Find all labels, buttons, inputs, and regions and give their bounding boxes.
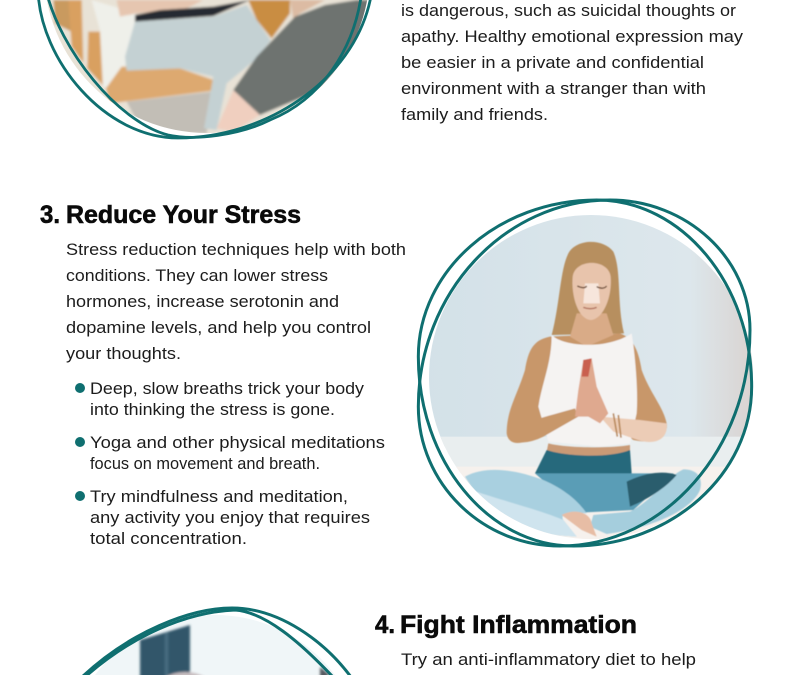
photo: woman meditating circle — [420, 207, 757, 550]
text block: section 2 closing paragraph: apathy. Healthy emotional expression may — [401, 27, 744, 46]
bullet: yoga: Yoga and other physical meditations — [90, 434, 385, 452]
bullet: mindfulness: any activity you enjoy that requires — [90, 509, 370, 527]
text block: stress reduction paragraph: hormones, increase serotonin and — [66, 292, 339, 311]
bullet: mindfulness: total concentration. — [90, 530, 247, 548]
text block: section 2 closing paragraph — [401, 1, 744, 124]
text block: section 2 closing paragraph: environment with a stranger than with — [401, 79, 706, 98]
bullet list: stress techniques — [75, 380, 385, 548]
bullet: deep breaths: Deep, slow breaths trick your body — [90, 380, 365, 398]
decorative rings: section 4 photo — [82, 608, 351, 675]
heading: 4. Fight Inflammation: Fight Inflammation — [400, 611, 637, 639]
bullet: mindfulness — [75, 488, 370, 548]
photo: section 4 partial circle — [95, 615, 335, 675]
heading: 4. Fight Inflammation: 4. — [375, 611, 395, 639]
text block: stress reduction paragraph — [66, 240, 406, 363]
text block: section 2 closing paragraph: is dangerous, such as suicidal thoughts or — [401, 1, 736, 20]
text block: section 2 closing paragraph: be easier in a private and confidential — [401, 53, 704, 72]
text block: stress reduction paragraph: Stress reduction techniques help with both — [66, 240, 406, 259]
bullet: mindfulness: Try mindfulness and meditation, — [90, 488, 348, 506]
text block: section 2 closing paragraph: family and friends. — [401, 105, 548, 124]
bullet: deep breaths: into thinking the stress is gone. — [90, 401, 335, 419]
decorative rings: therapy photo — [38, 0, 372, 138]
text block: stress reduction paragraph: conditions. They can lower stress — [66, 266, 328, 285]
text block: inflammation paragraph: Try an anti-inflammatory diet to help — [401, 650, 696, 669]
bullet: yoga: focus on movement and breath. — [90, 455, 320, 473]
text block: stress reduction paragraph: your thoughts. — [66, 344, 181, 363]
text block: stress reduction paragraph: dopamine levels, and help you control — [66, 318, 371, 337]
photo: therapy session circle — [46, 0, 368, 133]
decorative rings: meditating photo — [418, 200, 752, 546]
heading: 3. Reduce Your Stress: Reduce Your Stress — [66, 201, 301, 229]
heading: 3. Reduce Your Stress: 3. — [40, 201, 60, 229]
bullet: deep breaths — [75, 380, 365, 419]
bullet: yoga — [75, 434, 385, 473]
